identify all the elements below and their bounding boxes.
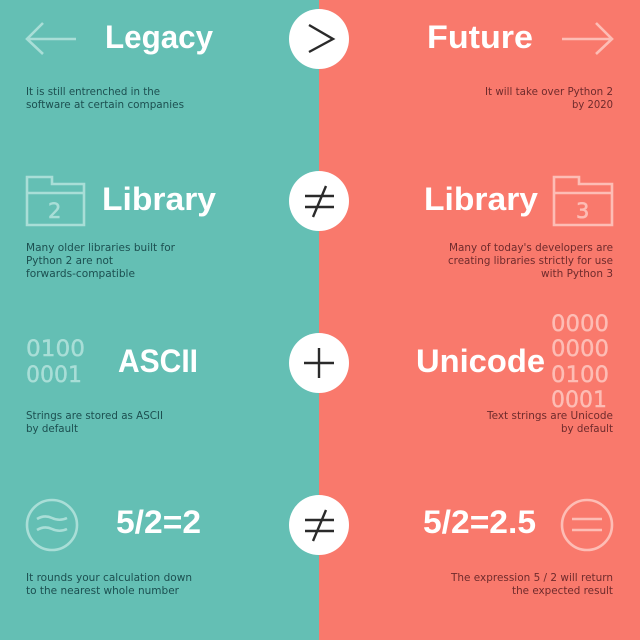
- icon: not-equal badge: [289, 171, 349, 231]
- text: ASCII description: Strings are stored as ASCII: [26, 410, 163, 422]
- icon: binary 0000 0000 0100 0001: [551, 311, 609, 413]
- icon: binary 0100 0001: [26, 336, 85, 388]
- text: legacy description: It is still entrenched in the: [26, 86, 160, 98]
- icon: not-equal badge: [289, 495, 349, 555]
- text: ASCII description: by default: [26, 423, 78, 435]
- text: library left description: Python 2 are not: [26, 255, 113, 267]
- row: division: [26, 495, 613, 597]
- text: expression description: [450, 572, 613, 597]
- text: expression description: the expected result: [512, 585, 613, 597]
- icon: plus badge: [289, 333, 349, 393]
- heading: Future: Future: [427, 19, 533, 55]
- icon: right arrow: [562, 23, 612, 54]
- heading: Unicode: Unicode: [416, 343, 545, 379]
- text: rounding description: [26, 572, 192, 597]
- icon: binary 0100 0001: 0001: [26, 362, 82, 388]
- row: library: [26, 171, 613, 280]
- icon: binary 0000 0000 0100 0001: 0100: [551, 362, 609, 388]
- text: future description: [485, 86, 613, 111]
- icon: greater-than badge: [289, 9, 349, 69]
- text: Unicode description: [486, 410, 613, 435]
- text: expression description: The expression 5 / 2 will return: [450, 572, 613, 584]
- text: rounding description: to the nearest whole number: [26, 585, 180, 597]
- heading: 5/2=2.5: 5/2=2.5: [423, 504, 536, 540]
- text: library right description: with Python 3: [541, 268, 613, 280]
- icon: binary 0000 0000 0100 0001: 0001: [551, 387, 607, 413]
- panel: Python 2 background: [0, 0, 319, 640]
- text: library left description: Many older libraries built for: [26, 242, 176, 254]
- heading: Library right: Library: [424, 181, 538, 217]
- icon: equals circle: [562, 500, 612, 550]
- text: library right description: Many of today's developers are: [449, 242, 613, 254]
- heading: ASCII: ASCII: [118, 343, 198, 379]
- icon: folder 3: 3: [576, 199, 589, 223]
- icon: folder 2: [27, 177, 84, 225]
- text: legacy description: software at certain companies: [26, 99, 184, 111]
- text: rounding description: It rounds your calculation down: [26, 572, 192, 584]
- icon: binary 0000 0000 0100 0001: 0000: [551, 311, 609, 337]
- icon: binary 0000 0000 0100 0001: 0000: [551, 336, 609, 362]
- text: library left description: forwards-compatible: [26, 268, 135, 280]
- text: legacy description: [26, 86, 184, 111]
- heading: 5/2=2: 5/2=2: [116, 504, 201, 540]
- text: Unicode description: Text strings are Unicode: [486, 410, 613, 422]
- text: future description: by 2020: [572, 99, 613, 111]
- row: legacy versus future: [26, 9, 613, 111]
- row: encoding: [26, 311, 613, 435]
- icon: left arrow: [27, 23, 76, 54]
- text: Unicode description: by default: [561, 423, 613, 435]
- icon: folder 2: 2: [48, 199, 61, 223]
- icon: folder 3: [554, 177, 612, 225]
- heading: Legacy: Legacy: [105, 19, 213, 55]
- text: library right description: [448, 242, 613, 280]
- text: future description: It will take over Python 2: [485, 86, 613, 98]
- icon: approximately-equal circle: [27, 500, 77, 550]
- icon: binary 0100 0001: 0100: [26, 336, 85, 362]
- panel: Python 3 background: [319, 0, 640, 640]
- text: library right description: creating libraries strictly for use: [448, 255, 613, 267]
- text: ASCII description: [26, 410, 163, 435]
- heading: Library left: Library: [102, 181, 216, 217]
- text: library left description: [26, 242, 176, 280]
